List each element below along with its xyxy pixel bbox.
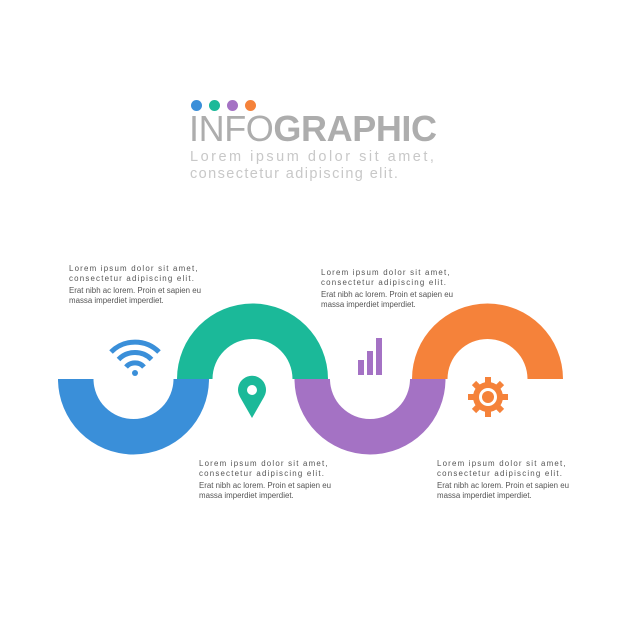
subtitle: consectetur adipiscing elit.	[190, 166, 399, 182]
text block 3: massa imperdiet imperdiet.	[199, 490, 294, 500]
text block 2: consectetur adipiscing elit.	[321, 278, 447, 286]
text block 2	[321, 268, 453, 308]
text block 1	[69, 264, 201, 304]
text block 2: Lorem ipsum dolor sit amet,	[321, 268, 451, 277]
text block 4: Lorem ipsum dolor sit amet,	[437, 459, 567, 468]
text block 4: consectetur adipiscing elit.	[437, 468, 563, 478]
text block 3: Erat nibh ac lorem. Proin et sapien eu	[199, 481, 331, 490]
orange segment	[412, 304, 563, 379]
purple segment	[294, 379, 446, 454]
text block 4: Erat nibh ac lorem. Proin et sapien eu	[437, 481, 569, 490]
text block 1: Lorem ipsum dolor sit amet,	[69, 264, 199, 273]
icon: wifi	[111, 342, 159, 376]
text block 4	[437, 459, 569, 500]
color dots	[191, 100, 256, 111]
subtitle	[190, 149, 436, 182]
text block 1: massa imperdiet imperdiet.	[69, 296, 164, 304]
text block 3: Lorem ipsum dolor sit amet,	[199, 459, 329, 468]
icon: bar chart	[358, 338, 382, 375]
blue segment	[58, 379, 209, 454]
text block 2: Erat nibh ac lorem. Proin et sapien eu	[321, 290, 453, 299]
title text: INFOGRAPHIC	[189, 108, 437, 149]
text block 3	[199, 459, 331, 500]
icon: gear	[468, 377, 508, 417]
text block 4: massa imperdiet imperdiet.	[437, 490, 532, 500]
icon: location pin	[238, 376, 266, 418]
subtitle: Lorem ipsum dolor sit amet,	[190, 149, 436, 165]
title block	[189, 100, 437, 182]
text block 3: consectetur adipiscing elit.	[199, 468, 325, 478]
text block 1: consectetur adipiscing elit.	[69, 274, 195, 282]
text block 2: massa imperdiet imperdiet.	[321, 300, 416, 308]
green segment	[177, 304, 328, 379]
text block 1: Erat nibh ac lorem. Proin et sapien eu	[69, 286, 201, 295]
